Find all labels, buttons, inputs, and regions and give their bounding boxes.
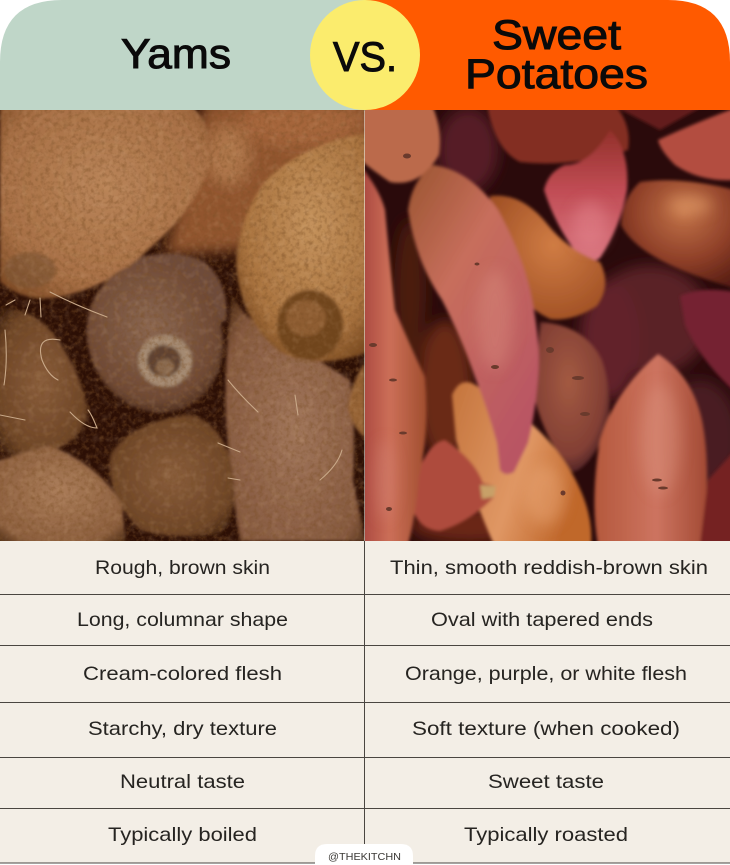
row: taste: Sweet taste (488, 771, 604, 793)
row: texture (88, 718, 680, 740)
roots (0, 292, 342, 480)
photo: sweet potatoes (360, 105, 730, 545)
row: skin (95, 557, 708, 579)
header band (0, 0, 730, 111)
header: yams side (0, 0, 368, 111)
sweet potato: right purple (680, 290, 730, 392)
row: skin: Rough, brown skin (95, 557, 270, 579)
yam: centre (85, 268, 225, 414)
sweet potato: pink (544, 130, 627, 261)
sweet potato: lower centre (535, 322, 610, 472)
comparison table (0, 541, 730, 863)
sweet potato: top centre (487, 105, 629, 164)
credit tag: @THEKITCHN (328, 851, 401, 863)
credit tag (315, 844, 413, 865)
row: texture: Starchy, dry texture (88, 718, 277, 740)
blemishes (369, 154, 668, 511)
heading: sweet potatoes: Potatoes (465, 50, 648, 97)
yam: bottom left (0, 446, 126, 545)
heading: yams: Yams (121, 30, 231, 77)
row: taste: Neutral taste (120, 771, 245, 793)
sweet potato: bottom orange (452, 382, 591, 545)
row: flesh (83, 663, 687, 685)
sweet potato: orange middle (490, 196, 605, 319)
yam: left middle (0, 308, 88, 456)
sweet potato: top right (658, 108, 730, 180)
yam: right column (226, 295, 365, 541)
sweet potato: right middle (621, 180, 730, 288)
heading: vs: VS. (333, 33, 397, 80)
row: flesh: Orange, purple, or white flesh (405, 663, 687, 685)
yam: behind centre (125, 254, 227, 330)
highlights (375, 196, 712, 525)
sweet potato: long centre (408, 165, 539, 474)
sweet potato: top left (360, 105, 440, 183)
row: cooking: Typically boiled (108, 824, 257, 846)
row: shape (77, 609, 653, 631)
heading: sweet potatoes: Sweet (492, 11, 621, 58)
yam: bottom centre (109, 414, 235, 536)
row: texture: Soft texture (when cooked) (412, 718, 680, 740)
vs badge (310, 0, 420, 110)
scar: centre yam (138, 335, 192, 387)
heading: sweet potatoes (465, 11, 648, 97)
photo: yams (0, 98, 375, 545)
row: shape: Oval with tapered ends (431, 609, 653, 631)
texture (0, 110, 365, 541)
row: cooking: Typically roasted (464, 824, 628, 846)
row: skin: Thin, smooth reddish-brown skin (390, 557, 708, 579)
scar: top right yam (277, 290, 343, 360)
sweet potato: bottom small (413, 440, 495, 531)
yam: far right (348, 362, 365, 438)
sweet potato: bottom right big (594, 354, 707, 545)
row: taste (120, 771, 604, 793)
header: sweet potatoes side (365, 0, 730, 111)
yam: top right (236, 132, 375, 362)
row: cooking (108, 824, 628, 846)
yam: top left (0, 105, 211, 298)
background dark tubers (394, 108, 730, 543)
row: flesh: Cream-colored flesh (83, 663, 282, 685)
sweet potato: left long (360, 165, 427, 545)
row: shape: Long, columnar shape (77, 609, 288, 631)
